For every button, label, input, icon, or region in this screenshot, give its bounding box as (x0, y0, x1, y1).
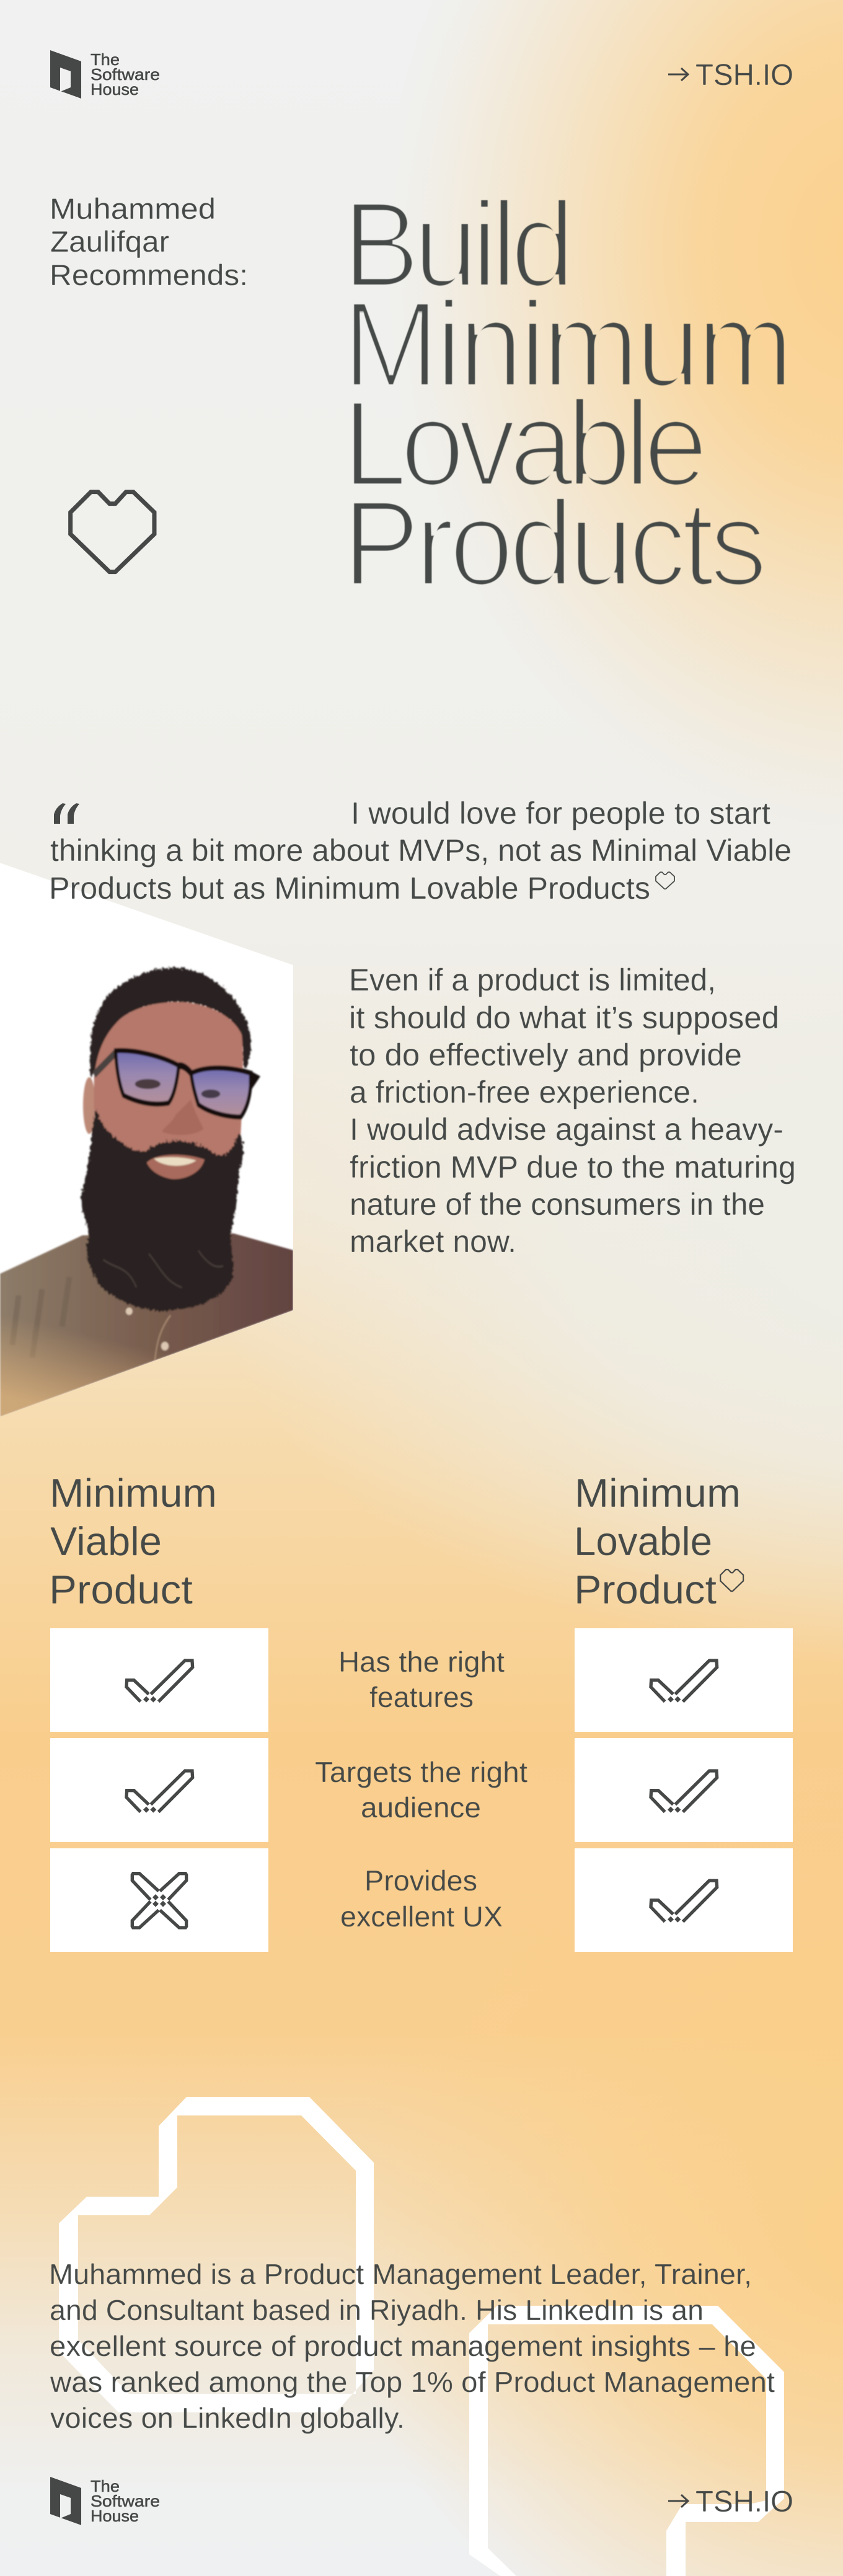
column heading: Minimum Lovable Product (574, 1470, 741, 1612)
table cell: MVP row 1 (50, 1628, 268, 1732)
row label: Provides excellent UX: excellent UX (340, 1900, 503, 1933)
column heading: Minimum Viable Product: Viable (50, 1519, 162, 1564)
supporting text: to do effectively and provide (350, 1038, 742, 1072)
portrait backdrop (0, 863, 293, 1417)
row label: Has the right features: Has the right (338, 1646, 505, 1678)
icon: arrow (668, 68, 688, 81)
author bio: Muhammed is a Product Management Leader, Trainer, (49, 2258, 752, 2290)
icon: small heart in heading (720, 1569, 743, 1591)
collar placket (155, 1315, 170, 1360)
glasses (94, 1051, 260, 1117)
row label: Provides excellent UX: Provides (364, 1864, 477, 1897)
supporting text: market now. (350, 1224, 516, 1259)
icon: check MVP row 1 (126, 1661, 193, 1703)
mouth (147, 1155, 205, 1179)
supporting text: Even if a product is limited, (349, 963, 716, 997)
row label: Provides excellent UX (340, 1864, 503, 1933)
quote text (49, 796, 792, 906)
column heading: Minimum Lovable Product: Minimum (575, 1470, 741, 1515)
table cell: MLP row 1 (575, 1628, 793, 1732)
row label: Targets the right audience (315, 1756, 527, 1824)
author bio: was ranked among the Top 1% of Product Management (50, 2366, 775, 2398)
panel: portrait photo (0, 863, 293, 1417)
beard (81, 1110, 243, 1311)
logo wordmark (90, 50, 160, 99)
quote text: I would love for people to start (351, 796, 770, 831)
icon: check MVP row 2 (126, 1771, 193, 1813)
row label: Has the right features: features (369, 1681, 474, 1713)
decorative outline shape: upper left (59, 2097, 374, 2412)
logo icon (50, 50, 81, 99)
supporting text: nature of the consumers in the (350, 1187, 765, 1222)
icon: check MLP row 2 (651, 1771, 717, 1813)
row label: Has the right features (338, 1646, 505, 1713)
portrait illustration (0, 968, 293, 1417)
author intro: Zaulifqar (50, 225, 169, 258)
column heading: Minimum Lovable Product: Product (574, 1567, 717, 1612)
row label: Targets the right audience: audience (361, 1791, 481, 1824)
beard grey strands (104, 1251, 223, 1287)
icon: quotation mark (54, 803, 79, 824)
title: Minimum (343, 276, 793, 412)
link: TSH.IO bottom (668, 2486, 793, 2518)
title: Products (343, 475, 767, 611)
ear (83, 1077, 95, 1134)
title: Lovable (343, 376, 708, 511)
icon: cross MVP row 3 (132, 1874, 187, 1928)
icon: check MLP row 1 (651, 1661, 717, 1703)
hair (90, 968, 251, 1078)
link text: TSH.IO (695, 59, 793, 92)
table cell: MVP row 3 (50, 1848, 268, 1952)
column heading: Minimum Viable Product: Product (49, 1567, 193, 1612)
author intro: Recommends: (50, 258, 248, 291)
column heading: Minimum Lovable Product: Lovable (574, 1519, 712, 1564)
shirt buttons (126, 1308, 169, 1351)
face (93, 1000, 244, 1157)
supporting text: it should do what it’s supposed (349, 1000, 779, 1035)
nose shadow (162, 1100, 203, 1135)
logo wordmark: Software (90, 2492, 160, 2510)
icon: arrow (668, 2495, 688, 2507)
supporting text: friction MVP due to the maturing (350, 1150, 796, 1184)
logo: bottom (50, 2477, 160, 2525)
link text: TSH.IO (695, 2486, 793, 2518)
shirt (0, 1233, 293, 1417)
logo wordmark: House (90, 2507, 139, 2525)
decorative outline shape: lower right (469, 2306, 784, 2576)
icon: large heart (71, 492, 154, 572)
icon: check MLP row 3 (651, 1881, 717, 1923)
supporting text (349, 963, 796, 1259)
supporting text: a friction-free experience. (350, 1075, 699, 1109)
author bio: and Consultant based in Riyadh. His LinkedIn is an (50, 2294, 704, 2326)
logo wordmark: The (90, 50, 120, 69)
supporting text: I would advise against a heavy- (350, 1112, 783, 1147)
row label: Targets the right audience: Targets the right (315, 1756, 527, 1788)
logo icon (50, 2477, 81, 2525)
author bio (49, 2258, 775, 2434)
logo wordmark: The (90, 2477, 120, 2495)
author intro (50, 192, 248, 291)
quote text: Products but as Minimum Lovable Products (49, 871, 650, 906)
column heading: Minimum Viable Product: Minimum (50, 1470, 217, 1515)
table cell: MLP row 3 (575, 1848, 793, 1952)
column heading: Minimum Viable Product (49, 1470, 217, 1612)
author bio: excellent source of product management insights – he (50, 2330, 756, 2362)
author intro: Muhammed (50, 192, 216, 225)
link: TSH.IO top (668, 59, 793, 92)
quote text: thinking a bit more about MVPs, not as Minimal Viable (50, 833, 792, 868)
title (343, 177, 793, 611)
table cell: MLP row 2 (575, 1738, 793, 1842)
logo: top (50, 50, 160, 99)
icon: small heart in quote (656, 872, 674, 889)
table cell: MVP row 2 (50, 1738, 268, 1842)
logo wordmark: House (90, 80, 139, 99)
logo wordmark: Software (90, 65, 160, 84)
title: Build (343, 177, 575, 312)
logo wordmark (90, 2477, 160, 2525)
author bio: voices on LinkedIn globally. (50, 2402, 405, 2434)
